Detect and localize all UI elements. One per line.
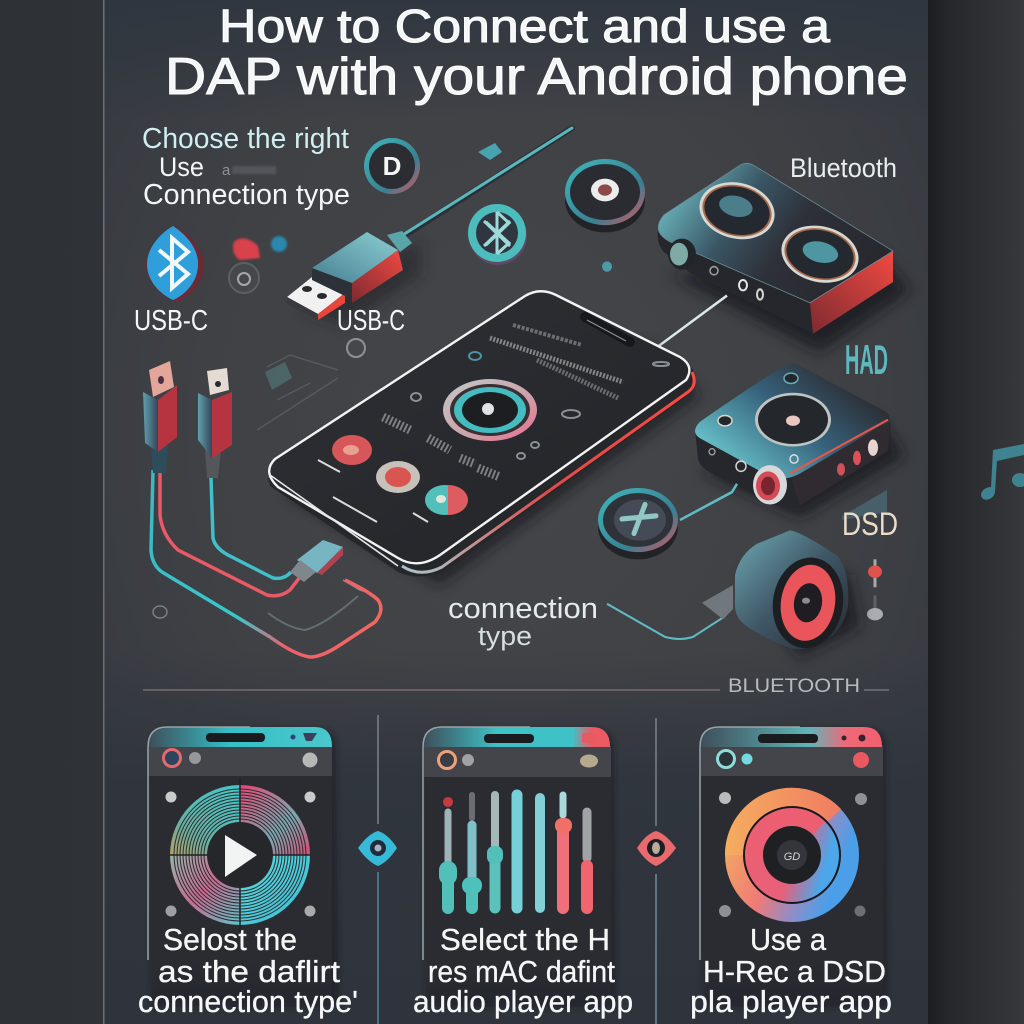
heading: choose the right connection type: Connection type <box>143 179 350 211</box>
playback buttons <box>332 435 468 515</box>
card 2 top bar <box>423 727 610 747</box>
lower-left white edge <box>270 475 398 566</box>
connector: red eye <box>637 718 676 1024</box>
label: USB-C centre: USB-C <box>337 305 405 337</box>
red edge highlight <box>402 372 694 572</box>
card 1 header icons <box>164 733 318 768</box>
phone <box>268 291 700 585</box>
icon: small faders <box>867 559 883 620</box>
icon: faint translucent card <box>257 355 338 430</box>
step caption 3 <box>690 922 892 1019</box>
title: How to Connect and use a <box>219 0 830 52</box>
connector: teal eye <box>358 715 397 1024</box>
heading: choose the right connection type: a <box>222 162 231 179</box>
phone notch <box>585 317 630 342</box>
card 3 body <box>702 775 883 1010</box>
notch highlight <box>587 320 626 341</box>
cables: USB-C leads <box>143 361 381 657</box>
step caption 3: Use a <box>750 922 827 957</box>
card 3 corner dots <box>719 792 867 917</box>
card 2: equaliser <box>423 727 616 1010</box>
icon: disc button <box>565 159 645 272</box>
card 1 body <box>150 775 332 1010</box>
card 1 header <box>148 745 332 776</box>
label: DSD with music flag <box>842 490 898 542</box>
chart: concentric play disc <box>170 778 310 932</box>
card 3 top bar <box>700 727 882 747</box>
card 2 notch <box>484 734 534 743</box>
step caption 1: Selost the <box>163 922 297 957</box>
device: compact DAC with lens <box>695 364 905 518</box>
chart: gradient donut: GD <box>784 851 800 863</box>
phone side edge <box>268 368 696 577</box>
icon: X button with cable <box>598 484 737 559</box>
step caption 3: pla player app <box>690 984 892 1019</box>
icon: teal bluetooth ring <box>468 204 527 265</box>
right speaker <box>776 218 864 290</box>
USB connector with cable <box>287 128 572 325</box>
phone screen <box>269 291 689 563</box>
step caption 2 <box>413 922 633 1019</box>
card 3 edge <box>700 727 800 960</box>
icon: D badge: D <box>383 151 401 181</box>
chart: gradient donut <box>725 788 859 922</box>
small screen icons <box>411 352 669 459</box>
card 1 edge <box>148 727 250 960</box>
left speaker <box>694 175 780 246</box>
icons: small red, blue and grey marks <box>229 236 365 357</box>
heading: choose the right connection type <box>142 123 350 211</box>
device: round speaker with cable <box>607 530 860 658</box>
label: Bluetooth: Bluetooth <box>790 153 897 183</box>
card 1: now playing <box>148 727 339 1010</box>
card 2 header icons <box>438 733 598 768</box>
card 3 notch <box>758 734 818 743</box>
icon: music note at right edge <box>981 444 1024 500</box>
step caption 2: audio player app <box>413 984 633 1019</box>
label: connection type <box>448 593 598 651</box>
label: connection type: connection <box>448 593 598 625</box>
icon: D badge <box>364 138 420 194</box>
card 3: donut chart <box>700 727 888 1010</box>
chart: sliders <box>439 795 587 908</box>
device: dual speaker DAC <box>657 163 910 352</box>
card 1 top bar <box>148 727 332 747</box>
divider with BLUETOOTH label: BLUETOOTH <box>728 676 860 697</box>
screen text lines <box>383 325 623 477</box>
step caption 1 <box>138 922 358 1019</box>
step caption 1: connection type' <box>138 984 358 1019</box>
label: USB-C left: USB-C <box>134 305 208 337</box>
centre dial <box>443 379 537 441</box>
heading: choose the right connection type: Choose the right <box>142 123 349 155</box>
label: connection type: type <box>478 621 532 651</box>
card 3 header icons <box>718 734 869 768</box>
card 2 edge <box>423 727 530 960</box>
step caption 2: res mAC dafint <box>428 954 615 989</box>
card 1 corner dots <box>166 792 316 916</box>
title <box>165 0 908 106</box>
card 2 body <box>425 777 611 1010</box>
card 2 header <box>424 746 611 777</box>
card 3 header <box>701 745 883 776</box>
text: HAD <box>845 336 888 383</box>
step caption 1: as the daflirt <box>158 954 340 989</box>
card 1 notch <box>206 733 265 742</box>
white dashes <box>318 460 428 522</box>
label: DSD with music flag: DSD <box>842 506 898 542</box>
step caption 2: Select the H <box>440 922 610 957</box>
title: DAP with your Android phone <box>165 48 908 106</box>
icon: bluetooth shield <box>146 226 204 302</box>
step caption 3: H-Rec a DSD <box>703 954 886 989</box>
heading: choose the right connection type: Use <box>159 152 204 182</box>
